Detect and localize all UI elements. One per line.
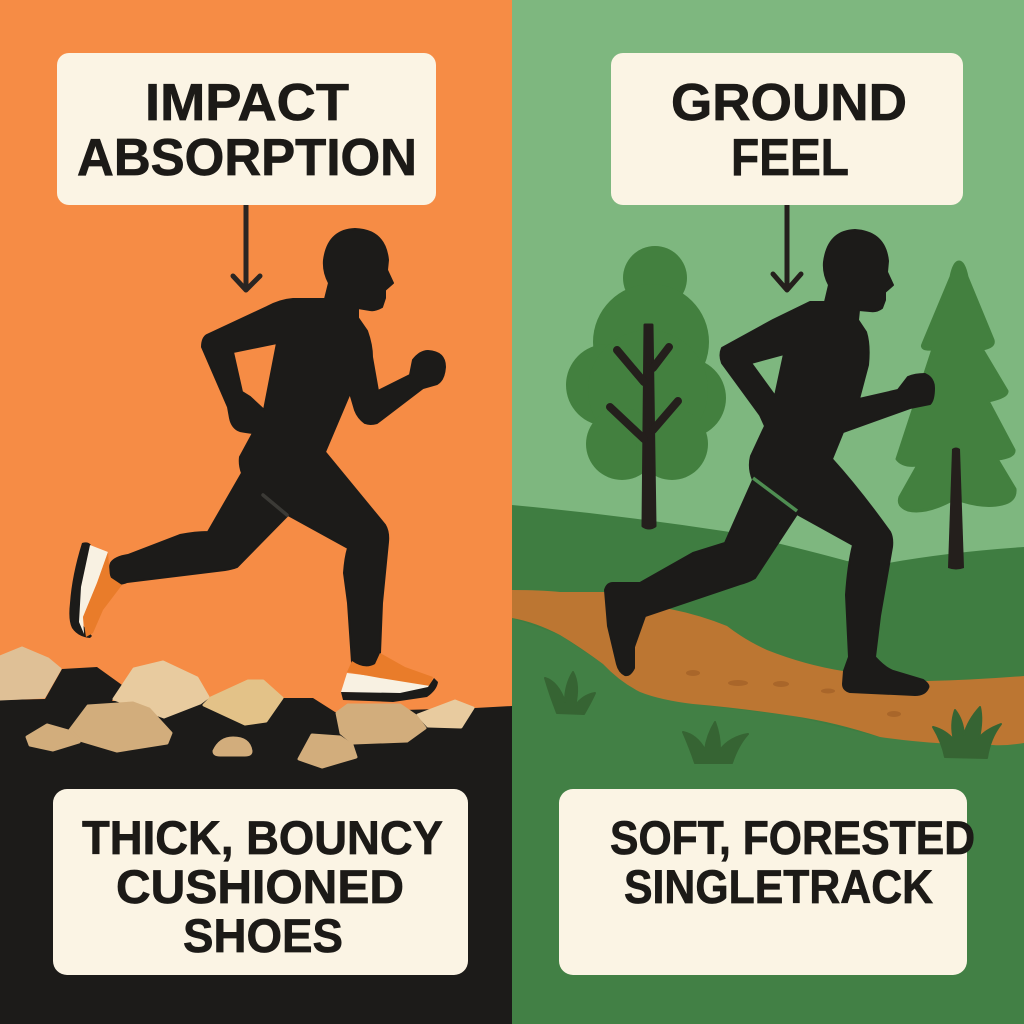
text block: cushioned shoes: THICK, BOUNCY (82, 811, 443, 864)
text block: cushioned shoes: SHOES (183, 909, 343, 962)
text block: forested singletrack: SINGLETRACK (624, 860, 933, 913)
panel: impact absorption (left) (0, 0, 512, 1024)
icon: grass tufts (545, 672, 1001, 763)
thigh shorts strip (753, 478, 797, 511)
heading: ground feel: GROUND (671, 74, 907, 132)
arrow down (773, 205, 801, 290)
icon: pine trunk (948, 448, 964, 570)
heading: impact absorption: ABSORPTION (77, 129, 417, 187)
trail (512, 590, 1024, 745)
text block: cushioned shoes: CUSHIONED (116, 860, 404, 913)
icon: round tree trunk and branches (610, 325, 678, 528)
black rocky ground (0, 667, 512, 1024)
icon: round tree canopy (566, 246, 726, 480)
runner silhouette with cushioned shoes (69, 229, 445, 702)
panel background: orange (0, 0, 512, 1024)
thigh shorts mark (263, 495, 287, 515)
foreground meadow (512, 618, 1024, 1024)
text block: forested singletrack (559, 789, 975, 975)
runner body (605, 230, 934, 695)
hills (512, 505, 1024, 1024)
heading: ground feel: FEEL (731, 129, 849, 187)
text block: forested singletrack: SOFT, FORESTED (610, 811, 975, 864)
icon: front cushioned shoe (341, 653, 438, 702)
icon: rear cushioned shoe (69, 542, 122, 638)
heading: ground feel (611, 53, 963, 205)
heading: impact absorption: IMPACT (145, 74, 349, 132)
heading: impact absorption (57, 53, 436, 205)
rocks (0, 648, 473, 767)
runner silhouette barefoot (605, 230, 934, 695)
runner body (110, 229, 445, 667)
icon: pine tree (897, 262, 1015, 511)
arrow down (233, 205, 260, 290)
panel background: sky green (512, 0, 1024, 1024)
panel: ground feel (right) (512, 0, 1024, 1024)
trail footprints (686, 670, 901, 717)
text block: cushioned shoes (53, 789, 468, 975)
